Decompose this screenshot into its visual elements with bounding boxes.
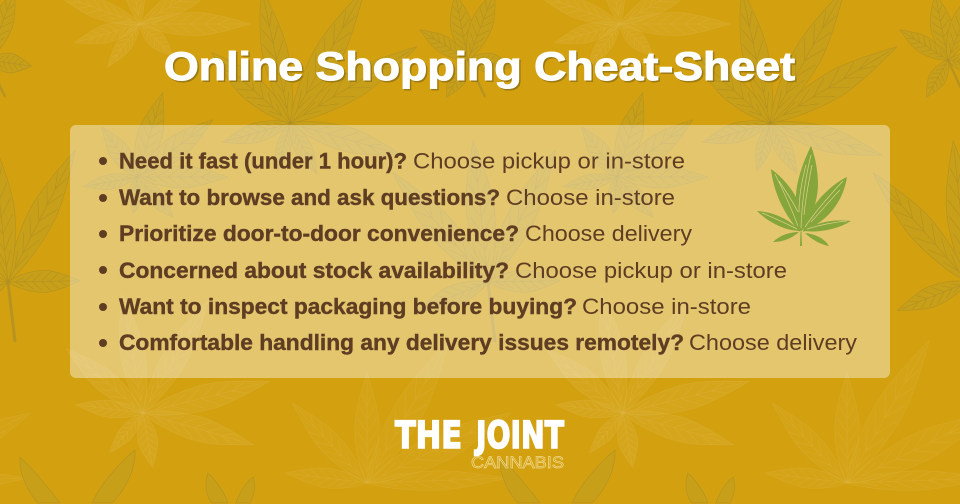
row 4 <box>99 258 787 283</box>
row 3 <box>99 221 692 246</box>
row 1: Need it fast (under 1 hour)? <box>119 148 407 174</box>
panel: cheat-sheet list <box>70 125 890 378</box>
row 5: Choose in-store <box>582 294 751 319</box>
logo: The Joint Cannabis: CANNABIS <box>471 454 564 472</box>
row 2 <box>99 185 675 210</box>
logo: The Joint Cannabis: THE <box>395 414 462 457</box>
row 5 <box>99 294 751 319</box>
row 3: Choose delivery <box>525 221 692 246</box>
row 1: Choose pickup or in-store <box>413 148 685 174</box>
bullet list <box>99 148 857 355</box>
row 6: Comfortable handling any delivery issues remotely? <box>119 330 684 355</box>
icon: green cannabis leaf <box>757 146 851 246</box>
row 4: Choose pickup or in-store <box>515 258 787 283</box>
row 2: Want to browse and ask questions? <box>119 185 500 210</box>
logo: The Joint Cannabis <box>395 414 565 472</box>
row 5: Want to inspect packaging before buying? <box>119 294 577 319</box>
title: Online Shopping Cheat-Sheet <box>164 45 795 89</box>
row 4: Concerned about stock availability? <box>119 258 509 283</box>
logo: The Joint Cannabis: JOINT <box>474 414 565 457</box>
row 1 <box>99 148 685 174</box>
row 3: Prioritize door-to-door convenience? <box>119 221 519 246</box>
row 6: Choose delivery <box>689 330 857 355</box>
row 2: Choose in-store <box>506 185 675 210</box>
title: Online Shopping Cheat-Sheet <box>166 46 796 90</box>
